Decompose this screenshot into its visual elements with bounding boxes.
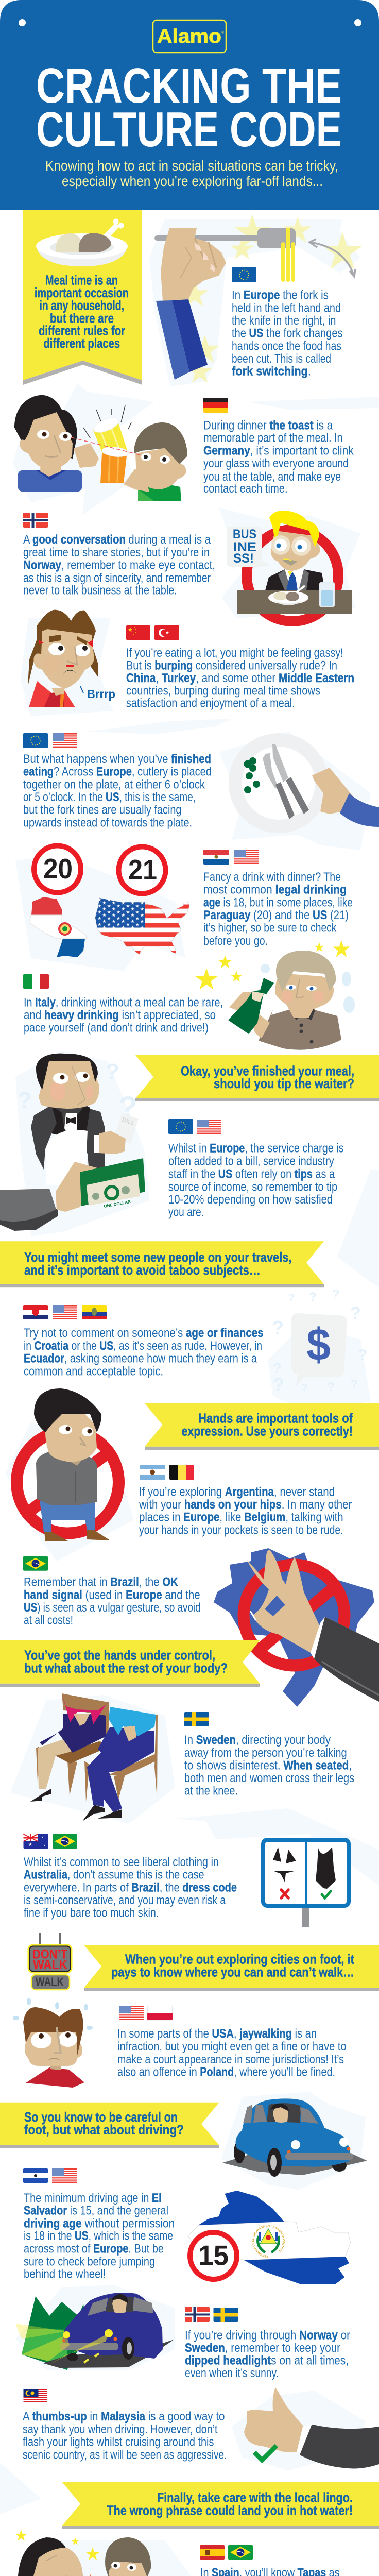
chair right xyxy=(114,1715,158,1800)
text: tipping: often added to a bill, service industry xyxy=(168,1155,334,1168)
icon: dollar bill: ONE DOLLAR xyxy=(104,1199,131,1209)
text: driving age: across most of Europe. But be xyxy=(24,2242,164,2256)
text: tipping: Whilst in Europe, the service charge is xyxy=(168,1142,344,1156)
text: jaywalking: also an offence in Poland, where you’ll be fined. xyxy=(117,2065,335,2079)
text: tipping xyxy=(168,1142,344,1219)
text: the toast: memorable part of the meal. In xyxy=(203,431,343,445)
ribbon text: different rules for xyxy=(39,323,125,338)
text: age or finances: common and acceptable topic. xyxy=(24,1364,163,1378)
text: good conversation: never to talk business at the table. xyxy=(23,583,177,597)
text: driving age: behind the wheel! xyxy=(24,2267,106,2281)
flag: Australia xyxy=(24,1834,48,1849)
emblem: REPUBLICA DE EL SALVADOR EN LA AMERICA CENTRAL xyxy=(252,2225,285,2258)
text: OK hand signal: hand signal (used in Europe and the xyxy=(24,1588,200,1602)
chair left xyxy=(36,1702,109,1802)
text: tipping: staff in the US often rely on tips as a xyxy=(168,1167,335,1181)
text: dress code: is semi-conservative, and you may even risk a xyxy=(24,1893,226,1907)
panel: meal time ribbon xyxy=(23,210,142,385)
flag: Croatia xyxy=(23,1305,48,1319)
text: fork switching: In Europe the fork is xyxy=(232,289,329,302)
flag: Argentina xyxy=(140,1465,165,1480)
icon: dollar speech bubble: ? xyxy=(301,1382,307,1394)
text: fork switching: held in the left hand and xyxy=(232,301,341,315)
flag: Spain xyxy=(200,2545,225,2560)
text: legal drinking age: Paraguay (20) and the US (21) xyxy=(203,908,349,922)
text: dress code: everywhere. In parts of Brazil, the dress code xyxy=(24,1880,237,1894)
illustration: waiter with dollar bill xyxy=(0,1054,145,1231)
flag: Brazil xyxy=(23,1556,48,1571)
icon: dollar speech bubble: ? xyxy=(332,1287,340,1301)
sign: 21 xyxy=(118,847,166,893)
illustration: woman burping xyxy=(28,610,115,707)
text: the toast: you at the table, and make eye xyxy=(203,470,341,484)
sign: 15 xyxy=(190,2232,237,2279)
text: the toast: your glass with everyone around xyxy=(203,456,349,470)
text: dress code: fine if you bare too much skin. xyxy=(24,1906,159,1920)
text: legal drinking age: Fancy a drink with dinner? The xyxy=(203,870,341,884)
text: OK hand signal xyxy=(24,1575,201,1628)
flag: Germany xyxy=(203,398,228,413)
flag: EU xyxy=(232,267,256,282)
text: legal drinking age: it’s higher, so be sure to check xyxy=(203,921,337,935)
text: jaywalking xyxy=(117,2027,347,2079)
text: finished eating: eating? Across Europe, cutlery is placed xyxy=(23,765,212,779)
check mark xyxy=(322,1891,331,1898)
banner: taboo subjects: and it’s important to avoid taboo subjects… xyxy=(24,1262,261,1278)
text: finished eating: But what happens when you’ve finished xyxy=(23,752,211,766)
text: fork switching: the US the fork changes xyxy=(232,327,343,341)
text: driving age: The minimum driving age in El xyxy=(24,2191,162,2205)
text: driving age: is 18 in the US, which is the same xyxy=(24,2229,173,2243)
flag: US xyxy=(197,1120,221,1134)
text: dress code: Australia, don’t assume this is the case xyxy=(24,1868,204,1882)
icon: dollar speech bubble: $ xyxy=(306,1319,331,1370)
icon: dollar speech bubble: ? xyxy=(288,1292,295,1303)
speech bubble: BUSINESS!: SS! xyxy=(233,551,254,566)
text: OK hand signal: at all costs! xyxy=(24,1614,73,1628)
text: thumbs-up: say thank you when driving. However, don’t xyxy=(23,2422,218,2436)
icon: dollar bill xyxy=(80,1158,145,1209)
text: age or finances xyxy=(24,1326,264,1378)
text: good conversation: great time to share stories, but if you’re in xyxy=(23,546,210,560)
sign: 21: 21 xyxy=(128,854,157,886)
text: fork switching: fork switching. xyxy=(232,364,311,378)
flag: Brazil xyxy=(53,1834,77,1849)
text: burping: China, Turkey, and some other Middle Eastern xyxy=(126,671,354,685)
banner: rest of your body: but what about the rest of your body? xyxy=(24,1660,228,1676)
text: the toast xyxy=(203,418,354,496)
icon: bill receipt: BILL xyxy=(121,1116,136,1127)
text: tipping: source of income, so remember to tip xyxy=(168,1180,337,1194)
text: dipped headlights: dipped headlights on at all times, xyxy=(185,2353,349,2367)
text: dipped headlights xyxy=(185,2329,350,2380)
banner: hands xyxy=(145,1403,379,1450)
subtitle: especially when you’re exploring far-off lands... xyxy=(62,173,323,189)
text: jaywalking: In some parts of the USA, jaywalking is an xyxy=(117,2027,317,2041)
logo: Alamo: ® xyxy=(221,31,225,35)
text: heavy drinking xyxy=(24,995,223,1035)
text: the toast: Germany, it’s important to clink xyxy=(203,444,354,457)
text: tipping: you are. xyxy=(168,1206,204,1219)
illustration: slap xyxy=(15,2530,182,2576)
icon: beach dress code sign xyxy=(263,1840,349,1927)
text: the toast: During dinner the toast is a xyxy=(203,418,333,432)
text: OK hand signal: US) is seen as a vulgar gesture, so avoid xyxy=(24,1601,201,1615)
banner: driving: So you know to be careful on xyxy=(24,2109,178,2125)
icon: dollar speech bubble: ? xyxy=(273,1374,284,1395)
icon: dollar speech bubble: ? xyxy=(350,1303,361,1323)
illustration: man with hands in pockets xyxy=(16,1388,118,1541)
flag: Ecuador xyxy=(82,1305,107,1319)
text: driving age xyxy=(24,2191,175,2281)
icon: don't walk sign xyxy=(28,1933,72,1990)
banner: rest of your body: You’ve got the hands under control, xyxy=(24,1648,215,1663)
text: thumbs-up xyxy=(23,2410,227,2462)
illustration: waiter with dollar bill: ? xyxy=(118,1090,137,1125)
text: fork switching: been cut. This is called xyxy=(232,352,331,366)
banner: local lingo xyxy=(62,2482,379,2529)
text: driving age: Salvador is 15, and the general xyxy=(24,2204,168,2217)
label: Brrrp: Brrrp xyxy=(87,687,115,701)
icon: dollar speech bubble xyxy=(272,1287,367,1395)
flag: US xyxy=(52,2168,77,2183)
sign: 20: 20 xyxy=(43,853,73,885)
text: legal drinking age xyxy=(203,870,353,948)
icon: dollar speech bubble: ? xyxy=(272,1317,284,1339)
banner: hands: Hands are important tools of xyxy=(198,1411,353,1426)
icon: dollar speech bubble: ? xyxy=(309,1290,317,1304)
illustration: drunk man with bottle xyxy=(195,940,355,1050)
banner: driving xyxy=(0,2103,219,2148)
text: driving age: driving age without permission xyxy=(24,2216,175,2230)
illustration: hand holding fork xyxy=(154,214,362,383)
flag: US xyxy=(53,733,77,748)
ribbon text xyxy=(35,273,129,351)
text: legal drinking age: before you go. xyxy=(203,934,268,948)
text: good conversation: Norway, remember to make eye contact, xyxy=(23,558,215,572)
flag: Turkey xyxy=(154,625,179,640)
flag: China xyxy=(126,625,150,640)
icon: don't walk sign: DON’T xyxy=(32,1947,67,1962)
text: heavy drinking: In Italy, drinking without a meal can be rare, xyxy=(24,995,223,1009)
text: hands on hips: with your hands on your hips. In many other xyxy=(139,1498,352,1512)
banner: taboo subjects xyxy=(0,1241,324,1287)
icon: plate of food xyxy=(36,218,128,266)
cross mark xyxy=(281,1890,288,1898)
icon: dollar speech bubble: ? xyxy=(358,1347,367,1364)
text: age or finances: Ecuador, asking someone how much they earn is a xyxy=(24,1352,257,1366)
icon: don't walk sign: WALK xyxy=(33,1958,67,1972)
title xyxy=(36,58,342,157)
text: fork switching: the knife in the right, in xyxy=(232,314,336,328)
flag: Brazil xyxy=(228,2545,253,2560)
banner: taboo subjects: You might meet some new people on your travels, xyxy=(24,1249,291,1265)
text: finished eating: but the fork tines are usually facing xyxy=(23,803,181,817)
illustration: worried jaywalker xyxy=(13,1998,93,2088)
subtitle xyxy=(45,158,338,189)
text: hands on hips: places in Europe, like Belgium, talking with xyxy=(139,1511,343,1524)
flag: Italy xyxy=(23,974,49,989)
illustration: seated couple crossing legs xyxy=(30,1693,158,1821)
text: dipped headlights: If you’re driving through Norway or xyxy=(185,2329,350,2343)
banner: should you tip: should you tip the waiter? xyxy=(214,1076,354,1091)
text: Sweden body language xyxy=(184,1733,354,1798)
ribbon text: in any household, xyxy=(39,298,124,313)
text: good conversation xyxy=(23,533,215,597)
flag: US xyxy=(119,2006,144,2020)
flag: Sweden xyxy=(184,1712,209,1726)
swimsuit xyxy=(316,1847,336,1889)
text: legal drinking age: most common legal drinking xyxy=(203,883,347,897)
banner: should you tip xyxy=(135,1055,379,1101)
illustration: El Salvador map with 15 sign xyxy=(187,2191,351,2284)
icon: don't walk sign: WALK xyxy=(36,1975,64,1989)
flag: Belgium xyxy=(169,1465,194,1480)
flag: US xyxy=(53,1305,77,1319)
speech bubble: BUSINESS! xyxy=(227,527,270,567)
sign: 20 xyxy=(34,846,81,892)
text: dipped headlights: Sweden, remember to keep your xyxy=(185,2341,340,2355)
map: Paraguay xyxy=(29,897,87,957)
hanging hole right xyxy=(354,19,361,26)
subtitle: Knowing how to act in social situations can be tricky, xyxy=(45,158,338,174)
text: dress code xyxy=(24,1855,237,1920)
ribbon text: important occasion xyxy=(35,285,129,300)
flag: Paraguay xyxy=(203,850,229,865)
illustration: thumbs up xyxy=(244,2387,379,2468)
text: age or finances: Try not to comment on someone’s age or finances xyxy=(24,1326,264,1340)
speech bubble: BUSINESS!: INE xyxy=(233,540,256,554)
map: USA small xyxy=(94,896,191,955)
text: Sweden body language: at the knee. xyxy=(184,1784,238,1798)
text: fork switching xyxy=(232,289,343,378)
flag: EU xyxy=(168,1119,193,1134)
text: thumbs-up: flash your lights whilst cruising around this xyxy=(23,2435,214,2449)
sign: 15: 15 xyxy=(198,2240,229,2272)
flag: El Salvador xyxy=(23,2168,48,2183)
text: hands on hips: If you’re exploring Argentina, never stand xyxy=(139,1485,335,1499)
text: finished eating: or 5 o’clock. In the US, this is the same, xyxy=(23,790,196,804)
flag: Poland xyxy=(147,2006,173,2020)
text: tipping: 10-20% depending on how satisfied xyxy=(168,1193,333,1207)
text: age or finances: in Croatia or the US, as it’s seen as rude. However, in xyxy=(24,1339,262,1353)
icon: dollar speech bubble: ? xyxy=(350,1378,358,1392)
text: burping xyxy=(126,646,354,710)
text: burping: countries, burping during meal time shows xyxy=(126,684,320,698)
text: dress code: Whilst it’s common to see liberal clothing in xyxy=(24,1855,219,1869)
text: good conversation: A good conversation during a meal is a xyxy=(23,533,211,547)
illustration: waiter with dollar bill: ? xyxy=(106,1059,119,1084)
text: finished eating: upwards instead of towards the plate. xyxy=(23,816,192,829)
text: finished eating: together on the plate, at either 6 o’clock xyxy=(23,777,205,791)
text: thumbs-up: scenic country, as it will be seen as aggressive. xyxy=(23,2448,227,2462)
text: Sweden body language: away from the person you’re talking xyxy=(184,1746,347,1760)
text: hands on hips xyxy=(139,1485,352,1537)
text: Sweden body language: to shows disinterest. When seated, xyxy=(184,1758,352,1772)
illustration: two men toasting xyxy=(14,395,187,501)
text: finished eating xyxy=(23,752,212,829)
ribbon text: different places xyxy=(43,335,120,351)
logo: Alamo xyxy=(153,20,226,53)
text: burping: But is burping considered universally rude? In xyxy=(126,658,337,672)
banner: rest of your body xyxy=(0,1640,260,1687)
text: heavy drinking: pace yourself (and don’t drink and drive!) xyxy=(24,1021,209,1035)
icon: dollar speech bubble: ? xyxy=(327,1380,335,1394)
illustration: blue car xyxy=(222,2098,367,2177)
illustration: plate with cutlery xyxy=(229,733,379,833)
text: OK hand signal: Remember that in Brazil, the OK xyxy=(24,1575,179,1589)
hanging hole left xyxy=(19,19,26,26)
text: good conversation: as this is a sign of sincerity, and remember xyxy=(23,571,211,585)
ribbon text: Meal time is an xyxy=(45,273,118,288)
flag: US xyxy=(234,850,259,864)
icon: dollar speech bubble: ? xyxy=(273,1360,282,1376)
header panel xyxy=(0,0,379,210)
text: burping: satisfaction and enjoyment of a meal. xyxy=(126,697,295,710)
text: dipped headlights: even when it’s sunny. xyxy=(185,2366,279,2380)
illustration: OK hand over Brazil map xyxy=(214,1548,379,1707)
flag: Malaysia xyxy=(24,2389,47,2403)
banner: on foot xyxy=(84,1945,379,1991)
text: fork switching: hands once the food has xyxy=(232,339,341,353)
text: the toast: contact each time. xyxy=(203,482,288,496)
illustration: waiter with dollar bill: ? xyxy=(18,1088,32,1113)
logo: Alamo: Alamo xyxy=(157,26,221,47)
text: thumbs-up: A thumbs-up in Malaysia is a good way to xyxy=(23,2410,225,2424)
bikini xyxy=(273,1847,296,1882)
icon: bill receipt xyxy=(114,1113,139,1143)
flag: Sweden xyxy=(213,2308,238,2322)
text: Sweden body language: In Sweden, directing your body xyxy=(184,1733,331,1747)
flag: EU xyxy=(23,733,48,748)
text: heavy drinking: and heavy drinking isn’t appreciated, so xyxy=(24,1008,216,1022)
flag: Norway xyxy=(185,2307,210,2322)
illustration: businessman at table xyxy=(227,511,352,621)
flag: Norway xyxy=(23,513,48,528)
illustration: drinking age signs and maps xyxy=(29,846,191,957)
text: driving age: sure to check before jumping xyxy=(24,2255,155,2268)
illustration: car with headlights on mountain road xyxy=(15,2293,174,2370)
banner: driving: foot, but what about driving? xyxy=(24,2122,184,2138)
ribbon text: but there are xyxy=(50,311,114,326)
speech bubble: BUSINESS!: BUS xyxy=(233,527,256,541)
